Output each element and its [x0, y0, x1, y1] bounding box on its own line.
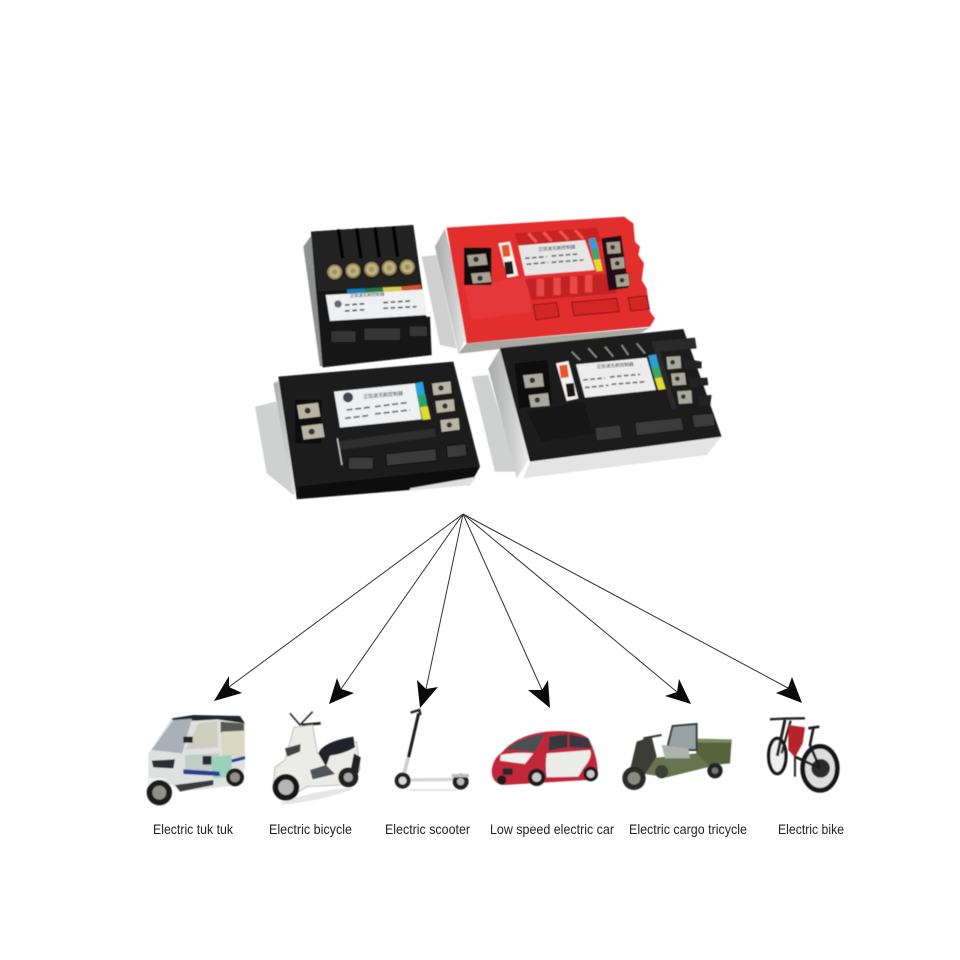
controller: black unit with silver plate, bottom left: 正弦波无刷控制器 — [363, 390, 403, 400]
label: electric scooter: Electric scooter — [385, 821, 470, 837]
arrow to electric tuk tuk — [214, 514, 463, 701]
icon: electric bike — [769, 718, 837, 790]
controller: black five-terminal unit, top left: 正弦波无刷控制器 — [350, 290, 385, 299]
icon: electric bicycle — [273, 712, 361, 807]
label: electric tuk tuk: Electric tuk tuk — [153, 821, 234, 837]
arrow to electric scooter — [417, 514, 463, 708]
controller: black unit with silver plate, bottom right: 正弦波无刷控制器 — [596, 361, 634, 370]
controller: black unit with silver plate, bottom right — [472, 329, 722, 478]
label: electric bike: Electric bike — [778, 821, 844, 837]
icon: electric scooter — [395, 710, 469, 790]
label: electric bicycle: Electric bicycle — [269, 821, 352, 837]
controller: red unit, top right — [422, 217, 655, 353]
controller: black five-terminal unit, top left — [303, 225, 432, 367]
arrow to electric bicycle — [329, 514, 463, 704]
icon: electric cargo tricycle — [622, 724, 732, 790]
controller: red unit, top right: 正弦波无刷控制器 — [538, 243, 576, 253]
arrow to electric bike — [463, 514, 802, 703]
arrow to electric cargo tricycle — [463, 514, 691, 704]
arrow to low speed electric car — [463, 514, 550, 708]
label: electric cargo tricycle: Electric cargo tricycle — [629, 821, 747, 837]
label: low speed electric car: Low speed electric car — [490, 821, 614, 837]
icon: electric tuk tuk — [147, 715, 245, 805]
controller: black unit with silver plate, bottom left — [255, 362, 480, 499]
icon: low speed electric car — [492, 731, 598, 786]
